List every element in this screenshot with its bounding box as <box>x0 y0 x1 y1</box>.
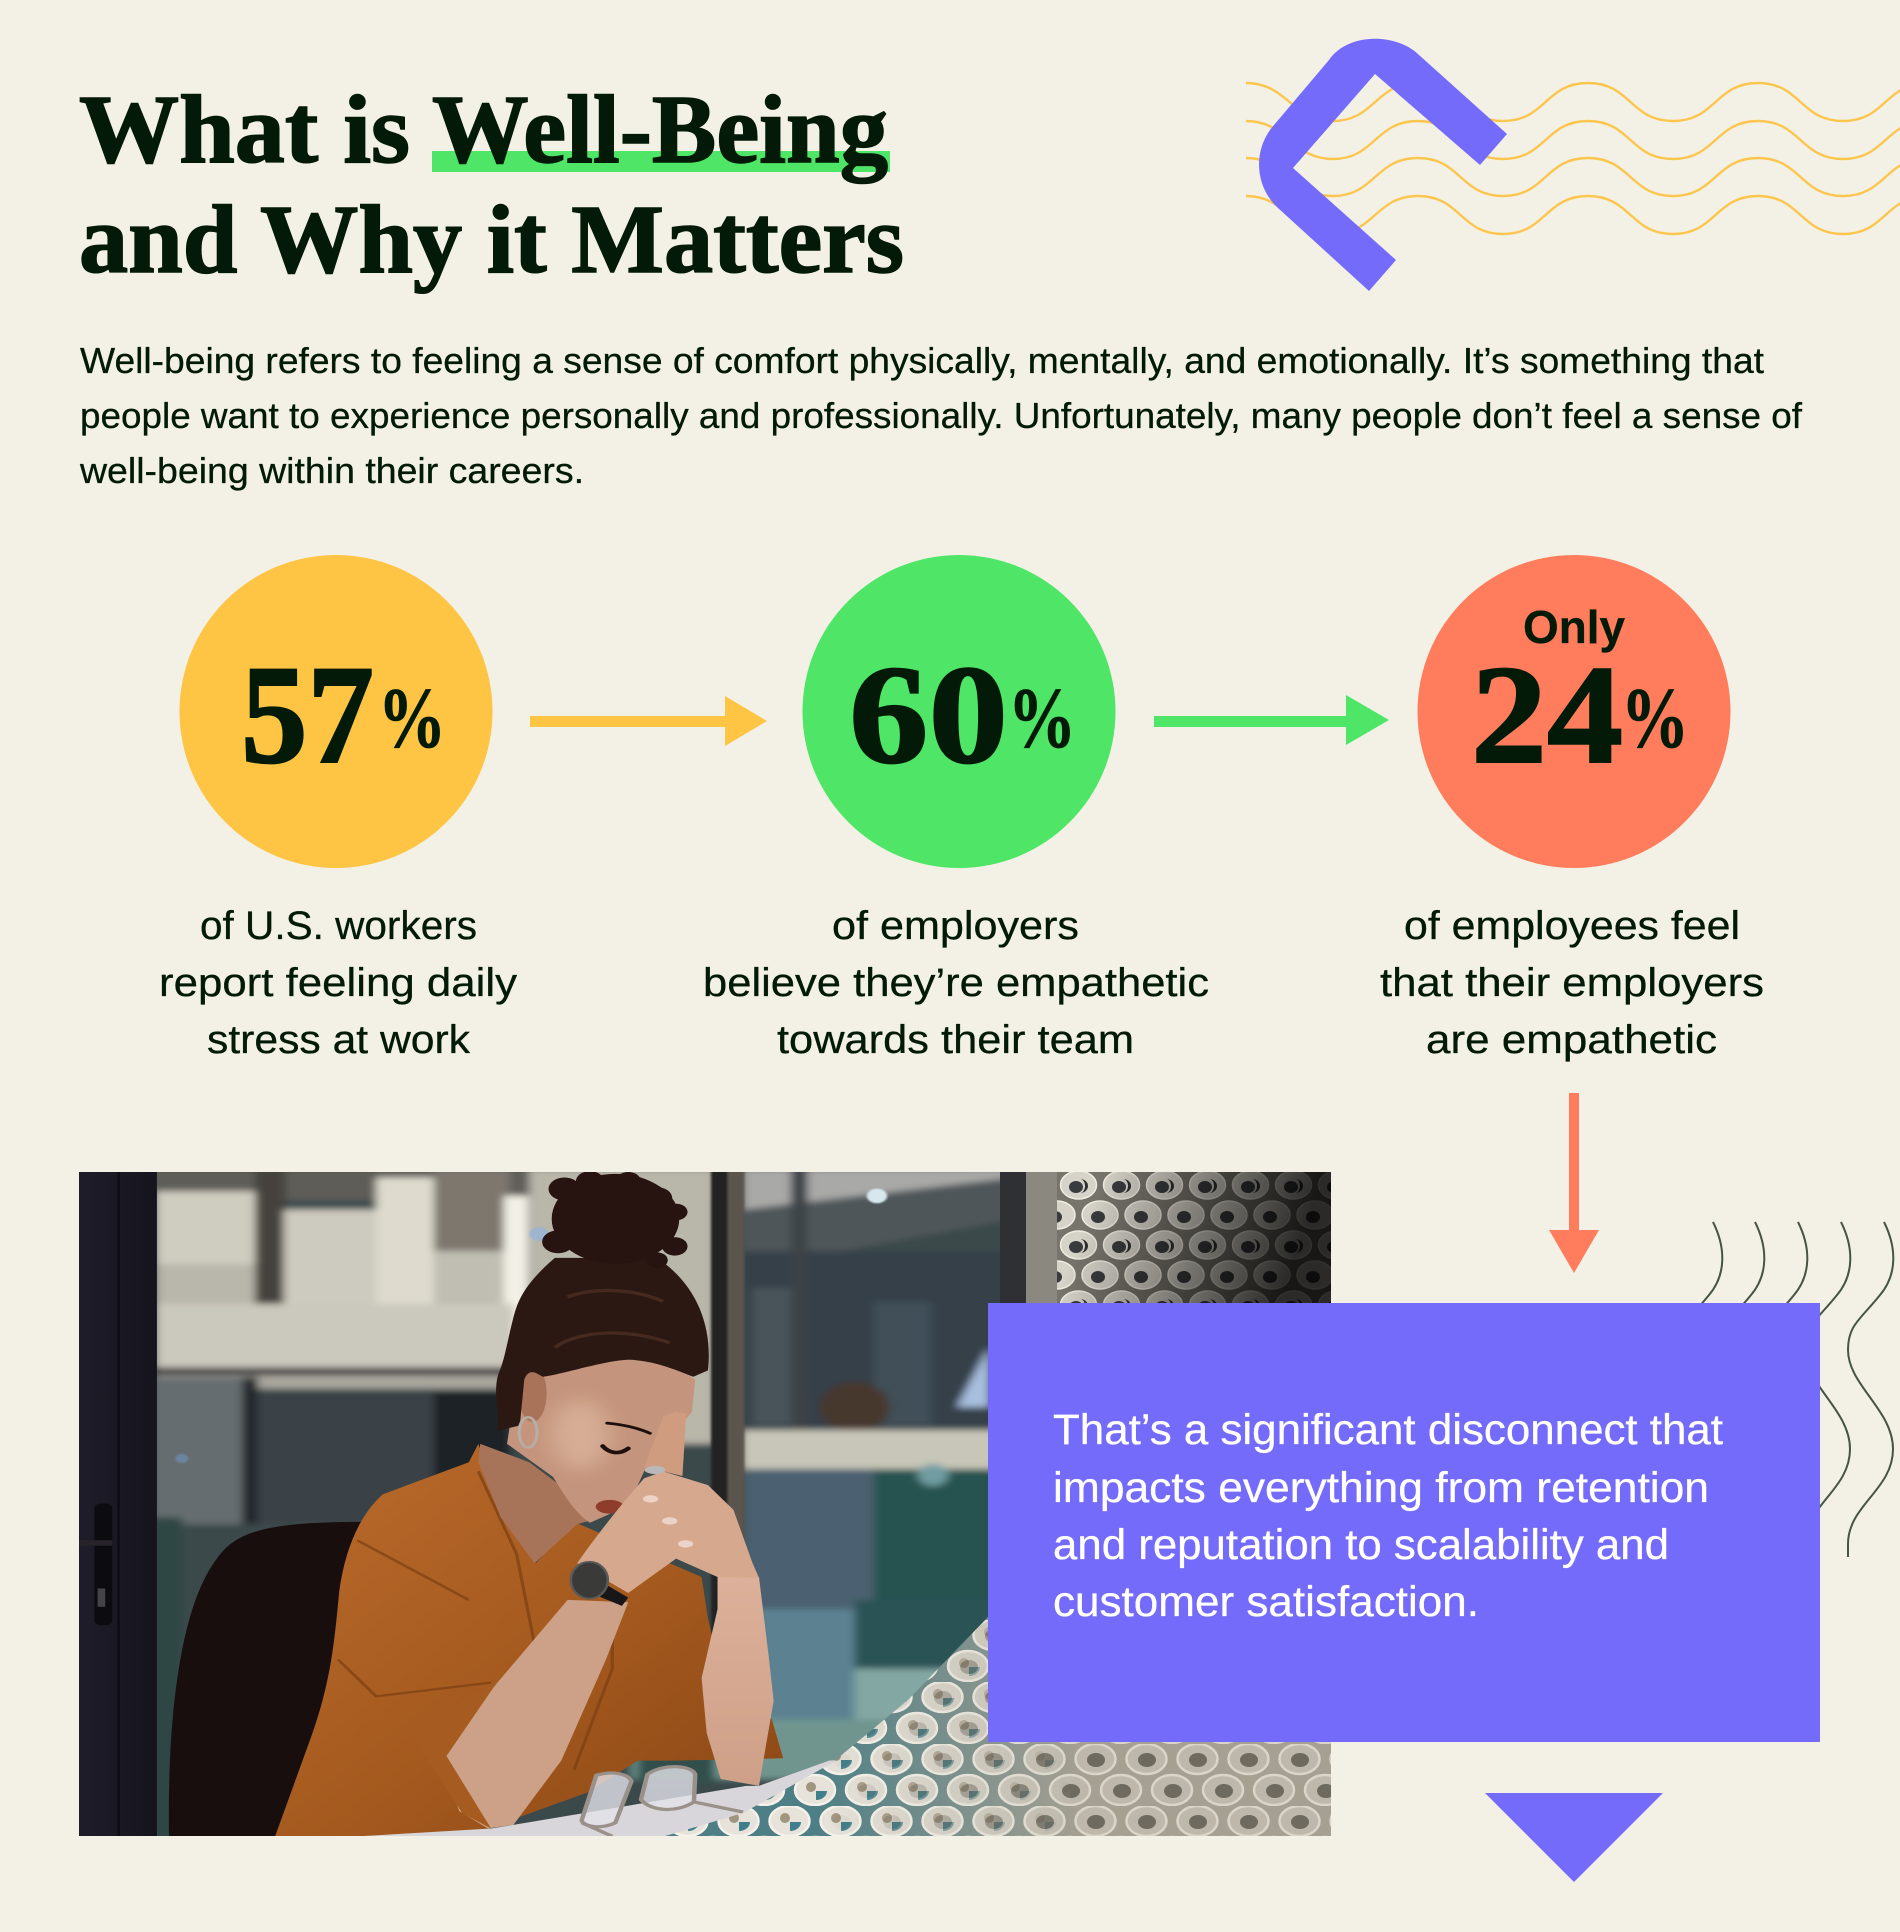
arrow: green <box>1154 695 1389 745</box>
photo: dark chair <box>169 1522 364 1839</box>
photo: right forearm <box>702 1575 774 1786</box>
photo background: blurred office <box>144 1168 1014 1839</box>
photo: top metallic pattern <box>1057 1172 1331 1307</box>
title highlight <box>432 151 890 172</box>
photo: stressed woman at desk <box>77 1168 1331 1839</box>
photo: closed eye and brow <box>603 1423 650 1453</box>
stat label: employers: believe they’re empathetic <box>703 961 1209 1005</box>
callout text: customer satisfaction. <box>1053 1578 1479 1626</box>
photo: lips <box>596 1500 624 1514</box>
title: Well-Being <box>432 76 888 184</box>
stat circle: 57% <box>180 555 492 868</box>
photo: raised fingers <box>644 1412 686 1476</box>
photo: sleeve cuff <box>440 1687 494 1828</box>
stat circle: 60%: % <box>1008 670 1076 766</box>
stat label: U.S. workers: stress at work <box>207 1018 471 1062</box>
stat circle: only 24% <box>1418 555 1730 868</box>
stat label: employees: that their employers <box>1380 961 1764 1005</box>
intro text <box>79 340 1803 491</box>
photo: clasped hands <box>577 1471 759 1593</box>
callout panel <box>988 1303 1820 1742</box>
icon: purple down triangle <box>1485 1793 1663 1882</box>
stat label: employers: towards their team <box>777 1018 1134 1062</box>
photo: hair <box>496 1258 709 1431</box>
photo: wristwatch <box>571 1562 628 1606</box>
decorative yellow wave lines <box>1246 83 1900 234</box>
stat label: employers: of employers <box>832 904 1079 948</box>
photo: shirt folds <box>338 1471 612 1770</box>
photo: dark wall and frame behind pattern <box>1000 1172 1057 1307</box>
title: What is <box>79 76 410 184</box>
stat label: U.S. workers: report feeling daily <box>159 961 517 1005</box>
title <box>79 76 904 294</box>
photo: hair highlights <box>555 1291 670 1347</box>
callout text <box>1053 1406 1723 1626</box>
stat label: U.S. workers <box>159 904 517 1062</box>
photo: ceiling lights <box>175 1189 887 1463</box>
stat label: employers <box>703 904 1209 1062</box>
stat circle: only 24%: Only <box>1523 601 1625 653</box>
photo: white desk <box>364 1760 836 1836</box>
stat label: employees: are empathetic <box>1426 1018 1717 1062</box>
callout text: and reputation to scalability and <box>1053 1521 1669 1569</box>
photo: neck <box>478 1444 603 1563</box>
photo: face <box>507 1360 695 1523</box>
photo: ring <box>645 1466 665 1474</box>
stat circle: only 24%: % <box>1621 670 1689 766</box>
callout text: impacts everything from retention <box>1053 1464 1709 1512</box>
photo: background pillar <box>711 1168 744 1646</box>
photo: ear <box>521 1372 546 1422</box>
stat circle: 57%: 57 <box>241 637 374 793</box>
photo: finger nails and creases <box>643 1495 693 1548</box>
title: and Why it Matters <box>79 186 904 294</box>
arrow: orange down <box>1549 1093 1599 1273</box>
stat circle: only 24%: 24 <box>1471 637 1623 793</box>
stat label: employees: of employees feel <box>1404 904 1740 948</box>
photo: shirt <box>274 1444 783 1839</box>
photo: left forearm <box>440 1600 628 1829</box>
photo: bottom metallic pattern <box>666 1617 1331 1836</box>
stat circle: 60% <box>802 555 1116 868</box>
intro text: well-being within their careers. <box>79 450 584 491</box>
stat circle: 60%: 60 <box>849 637 1008 793</box>
callout text: That’s a significant disconnect that <box>1053 1406 1723 1454</box>
photo: eyeglasses <box>582 1767 743 1836</box>
stat circle: 57%: % <box>378 670 446 766</box>
stat label: U.S. workers: of U.S. workers <box>200 904 477 948</box>
decorative dark squiggle lines <box>1677 1222 1893 1557</box>
icon: purple chevron <box>1259 39 1507 291</box>
photo: cheek highlight <box>552 1400 609 1469</box>
intro text: people want to experience personally and professionally. Unfortunately, many people don’t feel a sense of <box>80 395 1803 436</box>
stat label: employees <box>1380 904 1764 1062</box>
photo: hair bun <box>542 1171 688 1268</box>
photo: earring <box>519 1417 537 1447</box>
photo: door frame and handle <box>77 1168 157 1839</box>
intro text: Well-being refers to feeling a sense of comfort physically, mentally, and emotionally. It’s something that <box>80 340 1764 381</box>
arrow: yellow <box>530 696 767 746</box>
